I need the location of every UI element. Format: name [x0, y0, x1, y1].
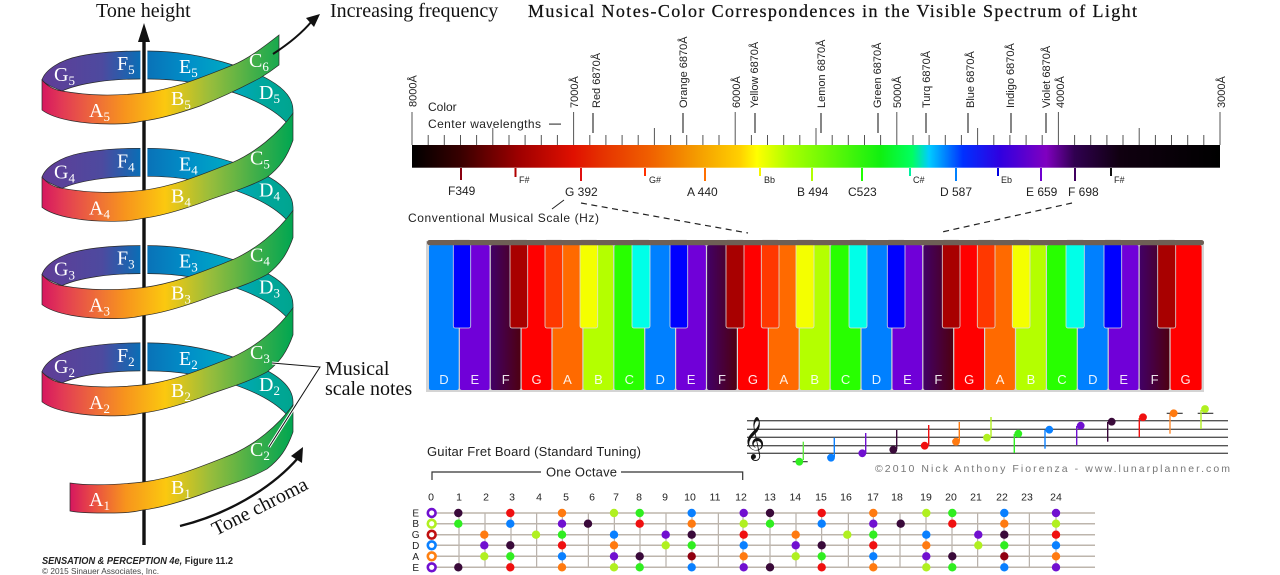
back band level 5: 5	[191, 65, 198, 80]
front band level 4: C	[250, 147, 263, 169]
front band level 4: B	[171, 185, 184, 207]
key letters: E	[470, 372, 479, 387]
fret numbers: 22	[996, 492, 1008, 504]
key letters: E	[903, 372, 912, 387]
fret numbers: 20	[945, 492, 957, 504]
back band level 3: 3	[68, 268, 75, 283]
front band level 1: 1	[103, 498, 110, 513]
back band level 4: D	[259, 179, 273, 201]
fret numbers: 1	[456, 492, 462, 504]
back band level 4: 4	[191, 162, 198, 177]
front band level 2	[42, 308, 293, 416]
key letters: G	[532, 372, 542, 387]
staff lines	[747, 421, 1228, 453]
fret numbers: 8	[636, 492, 642, 504]
wavelength labels: Green 6870Å	[871, 42, 884, 108]
musical note frequency labels: G 392	[565, 185, 598, 199]
front band level 2: 2	[184, 389, 191, 404]
one octave bracket	[432, 465, 743, 480]
figure credit: SENSATION & PERCEPTION 4e, Figure 11.2	[42, 555, 233, 567]
keyboard frame	[426, 241, 1204, 392]
color centre wavelength marks	[593, 113, 1046, 133]
fret numbers: 3	[509, 492, 515, 504]
wavelength labels: Lemon 6870Å	[815, 39, 828, 108]
fret numbers: 2	[483, 492, 489, 504]
back band level 2: 2	[68, 365, 75, 380]
back band level 3: 3	[191, 260, 198, 275]
front band level 5: A	[89, 100, 103, 122]
front band level 5: C	[249, 50, 262, 72]
front band level 3: C	[250, 245, 263, 267]
fret numbers: 21	[970, 492, 982, 504]
note dots frets 1 to 12	[454, 509, 748, 572]
back band level 4	[42, 148, 293, 220]
open string rings	[428, 509, 436, 571]
fret numbers: 12	[735, 492, 747, 504]
key letters: A	[563, 372, 572, 387]
key letters	[439, 372, 1191, 387]
fret numbers: 4	[536, 492, 542, 504]
key letters: C	[1057, 372, 1067, 387]
front band level 3: A	[89, 295, 103, 317]
front band level 5	[42, 35, 279, 124]
back band level 4: F	[117, 150, 128, 172]
keyboard top rail	[427, 240, 1204, 245]
back band level 3	[42, 246, 293, 318]
musical note frequency labels: F 698	[1068, 185, 1099, 199]
axis gaps in back bands	[140, 49, 147, 373]
fret numbers: 23	[1021, 492, 1033, 504]
key letters: G	[748, 372, 758, 387]
front band level 2: A	[89, 392, 103, 414]
back band level 4: E	[179, 153, 191, 175]
back band level 5: D	[259, 82, 273, 104]
fret numbers: 0	[428, 492, 434, 504]
back band level 5: F	[117, 53, 128, 75]
front band level 1	[70, 405, 293, 513]
conventional musical scale label	[408, 200, 599, 225]
key letters: A	[996, 372, 1005, 387]
note dots frets 13 to 24	[766, 509, 1060, 572]
back band level 2: E	[179, 348, 191, 370]
front band level 3: 4	[263, 254, 270, 269]
front band level 1: B	[171, 477, 184, 499]
back band level 2: 2	[191, 357, 198, 372]
back band level 3: 3	[273, 286, 280, 301]
front band level 3	[42, 211, 293, 319]
fret numbers: 16	[840, 492, 852, 504]
wavelength labels: Turq 6870Å	[920, 50, 933, 108]
back band level 3: F	[117, 248, 128, 270]
color centre wavelengths legend: Color	[428, 100, 457, 114]
wavelength labels: 3000Å	[1215, 76, 1228, 108]
musical note frequency labels: Bb	[764, 175, 775, 185]
wavelength labels: Red 6870Å	[590, 52, 603, 108]
back band level 2: 2	[273, 383, 280, 398]
front band level 4: 4	[103, 206, 110, 221]
dashed zoom lines to keyboard	[581, 203, 1072, 233]
wavelength labels: 6000Å	[730, 76, 743, 108]
key letters: F	[1151, 372, 1159, 387]
color centre wavelengths legend: Center wavelengths	[428, 117, 541, 131]
key letters: E	[1119, 372, 1128, 387]
panel: music staff	[743, 405, 1230, 475]
back band level 2: G	[54, 356, 68, 378]
back band level 5: 5	[68, 73, 75, 88]
back band level 5	[42, 51, 293, 123]
back band level 4: G	[54, 161, 68, 183]
key letters: B	[810, 372, 819, 387]
musical note frequency labels: A 440	[687, 185, 718, 199]
string names: A	[412, 552, 419, 563]
front band level 5: B	[171, 88, 184, 110]
fret numbers: 24	[1050, 492, 1062, 504]
string names	[412, 508, 420, 574]
fret numbers: 19	[920, 492, 932, 504]
front band level 2: 3	[263, 351, 270, 366]
guitar heading: Guitar Fret Board (Standard Tuning)	[427, 444, 641, 459]
increasing frequency label: Increasing frequency	[330, 0, 498, 22]
key letters: D	[1088, 372, 1097, 387]
front band level 4: 4	[184, 194, 191, 209]
key letters: G	[964, 372, 974, 387]
front band level 4	[42, 113, 293, 221]
wavelength labels: Orange 6870Å	[677, 36, 690, 108]
wavelength labels: 8000Å	[406, 75, 420, 107]
wavelength tick marks	[412, 112, 1220, 145]
musical note frequency labels: D 587	[940, 185, 972, 199]
fret numbers: 13	[764, 492, 776, 504]
string names: E	[412, 563, 419, 574]
back band level 5: 5	[273, 91, 280, 106]
tone height label: Tone height	[96, 0, 191, 22]
front band level 4: A	[89, 197, 103, 219]
panel: visible spectrum scale	[406, 36, 1228, 233]
front band level 5: 6	[262, 59, 269, 74]
ledger lines	[793, 413, 1213, 462]
musical note frequency labels: C#	[913, 175, 925, 185]
panel: guitar fret board	[412, 444, 1095, 574]
key letters: F	[502, 372, 510, 387]
title: Musical Notes-Color Correspondences in the Visible Spectrum of Light	[528, 1, 1137, 21]
conventional musical scale label: Conventional Musical Scale (Hz)	[408, 211, 599, 225]
key letters: C	[841, 372, 850, 387]
wavelength labels: 4000Å	[1054, 76, 1067, 108]
back band level 4: 4	[273, 188, 280, 203]
tone height axis arrow	[138, 23, 150, 545]
back band level 5: E	[179, 56, 191, 78]
fret numbers: 17	[867, 492, 879, 504]
strings	[432, 513, 1095, 567]
back band level 5: G	[54, 64, 68, 86]
key letters: D	[439, 372, 449, 387]
panel: colored piano keyboard	[426, 240, 1204, 392]
black keys	[453, 240, 1176, 328]
scale notes	[795, 405, 1209, 466]
front band level 1: C	[250, 439, 263, 461]
musical scale notes callout: Musical	[325, 358, 390, 380]
fret numbers: 5	[563, 492, 569, 504]
musical note frequency labels: B 494	[797, 185, 829, 199]
front band level 3: B	[171, 283, 184, 305]
front band level 3: 3	[184, 292, 191, 307]
string names: G	[412, 530, 420, 541]
back band level 2: F	[117, 345, 128, 367]
front band level 5: 5	[184, 97, 191, 112]
musical note frequency labels: F#	[519, 175, 530, 185]
white keys	[429, 245, 1202, 390]
string names: B	[412, 519, 419, 530]
back band level 2: 2	[128, 354, 135, 369]
fret numbers: 18	[891, 492, 903, 504]
fret numbers: 14	[789, 492, 801, 504]
spectrum gradient bar	[412, 145, 1220, 168]
musical scale notes callout	[269, 358, 412, 447]
back band level 5: 5	[128, 62, 135, 77]
key letters: D	[872, 372, 881, 387]
back band level 4: 4	[128, 159, 135, 174]
back band level 3: E	[179, 251, 191, 273]
back band level 2: D	[259, 374, 273, 396]
frets	[459, 513, 1056, 567]
front band level 2: B	[171, 380, 184, 402]
increasing frequency arrow	[273, 14, 320, 54]
wavelength labels	[406, 36, 1228, 108]
key letters: G	[1180, 372, 1191, 387]
musical note frequency labels	[448, 175, 1125, 199]
musical note frequency labels: G#	[649, 175, 661, 185]
musical scale notes callout: scale notes	[325, 378, 412, 400]
fret numbers	[428, 492, 1062, 504]
key letters: F	[934, 372, 942, 387]
figure credit	[42, 555, 233, 575]
string names: E	[412, 508, 419, 520]
back band level 3: G	[54, 259, 68, 281]
fret numbers: 9	[662, 492, 668, 504]
wavelength labels: 7000Å	[568, 76, 581, 108]
front band level 5: 5	[103, 109, 110, 124]
key letters: B	[594, 372, 603, 387]
wavelength labels: 5000Å	[891, 76, 904, 108]
front band level 1: 2	[263, 448, 270, 463]
front band level 2: C	[250, 342, 263, 364]
wavelength labels: Blue 6870Å	[964, 50, 977, 108]
front band level 1: 1	[184, 486, 191, 501]
musical note frequency labels: E 659	[1026, 185, 1058, 199]
front band level 2: 2	[103, 401, 110, 416]
key letters: C	[625, 372, 634, 387]
musical note marks under spectrum	[461, 168, 1111, 181]
fret numbers: 7	[613, 492, 619, 504]
wavelength labels: Violet 6870Å	[1040, 45, 1053, 108]
key letters: B	[1027, 372, 1035, 387]
panel: pitch helix diagram	[42, 0, 498, 575]
back band level 2	[42, 343, 293, 415]
fret numbers: 10	[684, 492, 696, 504]
musical note frequency labels: Eb	[1001, 175, 1012, 185]
tone chroma label: Tone chroma	[208, 473, 312, 540]
front band level 4: 5	[263, 156, 270, 171]
string names: D	[412, 541, 419, 552]
fret numbers: 11	[710, 492, 721, 504]
key letters: F	[718, 372, 726, 387]
front band level 3: 3	[103, 304, 110, 319]
one octave bracket: One Octave	[546, 465, 617, 480]
fret numbers: 6	[589, 492, 595, 504]
color centre wavelengths legend	[428, 100, 561, 131]
wavelength labels: Indigo 6870Å	[1004, 43, 1017, 108]
musical note frequency labels: F349	[448, 184, 476, 198]
key letters: D	[656, 372, 665, 387]
front band level 1: A	[89, 489, 103, 511]
musical note frequency labels: C523	[848, 185, 877, 199]
icon: treble clef: 𝄞	[743, 416, 765, 461]
key letters: A	[779, 372, 788, 387]
wavelength labels: Yellow 6870Å	[748, 41, 761, 108]
fret numbers: 15	[815, 492, 827, 504]
tone chroma arrow	[180, 447, 303, 526]
back band level 4: 4	[68, 170, 75, 185]
copyright line: ©2010 Nick Anthony Fiorenza - www.lunarplanner.com	[875, 463, 1230, 475]
key letters: E	[687, 372, 696, 387]
back band level 3: D	[259, 277, 273, 299]
musical note frequency labels: F#	[1114, 175, 1125, 185]
back band level 3: 3	[128, 257, 135, 272]
